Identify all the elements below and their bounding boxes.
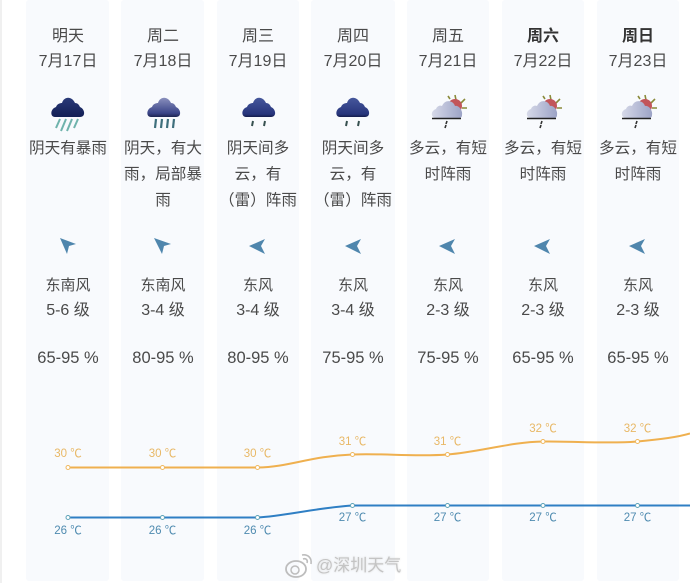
wind text: 5-6 级	[46, 302, 90, 319]
wind text: 3-4 级	[236, 302, 280, 319]
wind text: 东风	[528, 277, 558, 294]
low temperature line: 26 ℃	[54, 525, 82, 537]
humidity text: 65-95 %	[512, 349, 574, 367]
weather descriptions: 时阵雨	[520, 166, 566, 183]
humidity text: 75-95 %	[417, 349, 479, 367]
icon: east wind arrow	[345, 239, 361, 254]
icon: east wind arrow	[534, 239, 550, 254]
humidity text: 65-95 %	[607, 349, 669, 367]
watermark text: @深圳天气	[316, 556, 401, 575]
weather descriptions	[29, 140, 677, 209]
weather descriptions: 阴天有暴雨	[29, 140, 107, 157]
humidity text: 65-95 %	[37, 349, 99, 367]
icon: showers	[336, 98, 369, 126]
weather descriptions: 多云，有短	[409, 140, 487, 157]
weather descriptions: （雷）阵雨	[314, 192, 392, 209]
low temperature line	[54, 504, 690, 537]
wind text: 东南风	[140, 277, 186, 294]
wind text: 东风	[623, 277, 653, 294]
wind text: 2-3 级	[521, 302, 565, 319]
low temperature line: 27 ℃	[434, 512, 462, 524]
date headings: 7月22日	[514, 53, 572, 70]
date headings: 7月23日	[609, 53, 667, 70]
icon: east wind arrow	[439, 239, 455, 254]
low temperature line: 26 ℃	[149, 525, 177, 537]
date headings: 7月18日	[134, 53, 192, 70]
high temperature line: 31 ℃	[339, 436, 367, 448]
weather descriptions: 云，有	[235, 166, 281, 183]
date headings: 周五	[432, 28, 464, 45]
weather descriptions: 雨	[155, 192, 171, 209]
date headings: 7月21日	[419, 53, 477, 70]
icon: showers	[242, 98, 275, 126]
icon: southeast wind arrow	[60, 238, 76, 254]
high temperature line: 30 ℃	[54, 448, 82, 460]
icon: sun and cloud	[432, 95, 467, 128]
high temperature line: 30 ℃	[244, 448, 272, 460]
date headings: 周六	[527, 28, 559, 45]
low temperature line: 26 ℃	[244, 525, 272, 537]
icon: east wind arrow	[249, 239, 265, 254]
weather descriptions: 多云，有短	[504, 140, 582, 157]
wind text: 东风	[243, 277, 273, 294]
icon: sun and cloud	[622, 95, 657, 128]
date headings	[39, 27, 667, 70]
weather descriptions: 云，有	[330, 166, 376, 183]
humidity text	[37, 349, 669, 367]
date headings: 明天	[52, 28, 84, 45]
icon: east wind arrow	[629, 239, 645, 254]
high temperature line: 31 ℃	[434, 436, 462, 448]
date headings: 周三	[242, 28, 274, 45]
high temperature line: 32 ℃	[624, 423, 652, 435]
weather descriptions: 时阵雨	[425, 166, 471, 183]
low temperature line: 27 ℃	[529, 512, 557, 524]
low temperature line: 27 ℃	[339, 512, 367, 524]
date headings: 7月20日	[324, 53, 382, 70]
date headings: 周日	[622, 28, 654, 45]
left edge strip	[0, 0, 2, 583]
high temperature line: 32 ℃	[529, 423, 557, 435]
weather descriptions: （雷）阵雨	[219, 192, 297, 209]
humidity text: 80-95 %	[227, 349, 289, 367]
high temperature line	[54, 423, 690, 470]
high temperature line: 30 ℃	[149, 448, 177, 460]
watermark	[285, 554, 401, 578]
wind text: 3-4 级	[331, 302, 375, 319]
date headings: 7月19日	[229, 53, 287, 70]
wind text: 东南风	[45, 277, 90, 294]
weather descriptions: 阴天间多	[322, 140, 384, 157]
weather descriptions: 多云，有短	[599, 140, 677, 157]
weather icons	[51, 94, 657, 132]
icon: sun and cloud	[527, 95, 562, 128]
icon: southeast wind arrow	[154, 238, 171, 254]
wind text: 2-3 级	[616, 302, 660, 319]
weather descriptions: 阴天，有大	[124, 140, 202, 157]
wind text	[45, 277, 660, 319]
low temperature line: 27 ℃	[624, 512, 652, 524]
date headings: 周四	[337, 28, 369, 45]
wind text: 东风	[433, 277, 463, 294]
weather descriptions: 雨，局部暴	[124, 166, 202, 183]
icon: weibo logo	[285, 554, 312, 578]
humidity text: 75-95 %	[322, 349, 384, 367]
wind text: 3-4 级	[141, 302, 185, 319]
wind text: 2-3 级	[426, 302, 470, 319]
icon: heavy rain	[51, 98, 84, 131]
wind text: 东风	[338, 277, 368, 294]
weather descriptions: 时阵雨	[615, 166, 661, 183]
weather descriptions: 阴天间多	[227, 140, 289, 157]
humidity text: 80-95 %	[132, 349, 194, 367]
date headings: 周二	[147, 28, 179, 45]
icon: rain	[147, 98, 180, 128]
date headings: 7月17日	[39, 53, 97, 70]
